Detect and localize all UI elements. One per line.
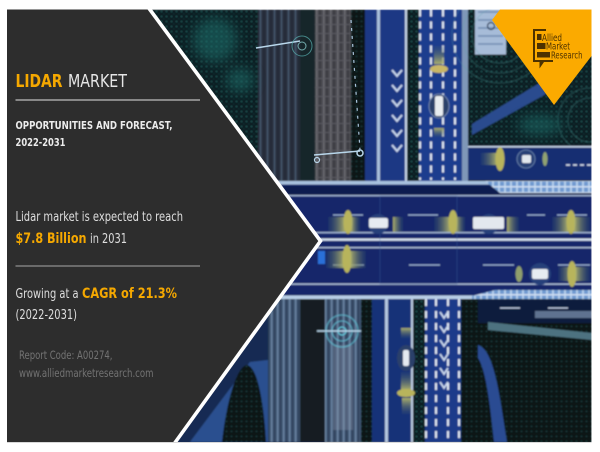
trees: lower right [461, 299, 592, 443]
median: lower centre [413, 299, 425, 442]
section rule [16, 266, 200, 267]
logo wordmark: Market [546, 42, 570, 52]
median: lower strip [300, 299, 325, 442]
building [475, 10, 506, 54]
CAGR statement: CAGR of 21.3% [82, 286, 177, 302]
side road: diagonal ramp [472, 82, 546, 135]
logo wordmark [542, 33, 582, 62]
radar rings: upper right [451, 10, 592, 145]
ramp: lower left curves [190, 360, 268, 442]
overpass: main road deck [275, 181, 592, 300]
road: upper east carriageway [419, 10, 468, 182]
median: upper strip [300, 10, 314, 180]
CAGR statement [16, 286, 177, 323]
vehicle with sensor zones: lower road [397, 328, 415, 414]
railway: upper centre [315, 10, 351, 182]
title rule [16, 100, 200, 101]
lower left ground [178, 316, 326, 442]
vehicle with sensor zones: right road [481, 147, 548, 171]
railway: upper left [258, 10, 300, 182]
logo wordmark: Research [551, 50, 582, 62]
road: right side east-west [468, 146, 592, 180]
trees: lower left [222, 365, 266, 442]
market size statement: $7.8 Billion [16, 231, 86, 247]
upper trees: brighter teal patches [193, 18, 562, 135]
title: LIDAR [16, 71, 63, 92]
gantry and sensor rings: upper [256, 20, 363, 162]
title [16, 71, 127, 92]
median: centre [408, 10, 418, 180]
median: lower green [361, 299, 372, 442]
dark text panel with white edge [7, 10, 320, 442]
market size statement [16, 210, 183, 247]
vehicle with sensor zones: upper road [429, 46, 449, 137]
CAGR statement: Growing at a [16, 287, 78, 302]
road: lower right east-west [478, 299, 592, 340]
trees: upper left [154, 10, 258, 152]
subtitle [16, 119, 172, 149]
market size statement: Lidar market is expected to reach [16, 210, 183, 225]
frame edge shadow [7, 442, 592, 443]
sensor rings and gantry: lower centre [317, 315, 368, 347]
road: upper west carriageway [365, 10, 407, 182]
road: lower right curved ramp [478, 345, 507, 442]
logo badge [492, 10, 592, 105]
vehicles with sensor zones: lower deck lane [318, 245, 590, 287]
CAGR statement: (2022-2031) [16, 308, 77, 323]
railway: lower centre [325, 299, 361, 442]
trees: upper right [468, 10, 593, 144]
median: green strip [351, 10, 365, 182]
market size statement: in 2031 [90, 232, 127, 247]
road: lower west carriageway [372, 299, 413, 442]
subtitle: OPPORTUNITIES AND FORECAST, [16, 119, 172, 132]
report code and website: Report Code: A00274, [19, 348, 112, 362]
report code and website: www.alliedmarketresearch.com [19, 366, 154, 380]
railway: lower left [268, 299, 300, 442]
report code and website [19, 348, 154, 380]
white chevron edge [148, 7, 320, 444]
icon: logo speech bracket [533, 29, 553, 68]
logo wordmark: Allied [542, 33, 562, 44]
title: MARKET [68, 71, 127, 92]
subtitle: 2022-2031 [16, 136, 66, 149]
road: lower east carriageway [425, 299, 461, 442]
vehicles with sensor zones: upper deck lane [328, 210, 590, 234]
background photo: aerial highway scene [152, 10, 592, 442]
